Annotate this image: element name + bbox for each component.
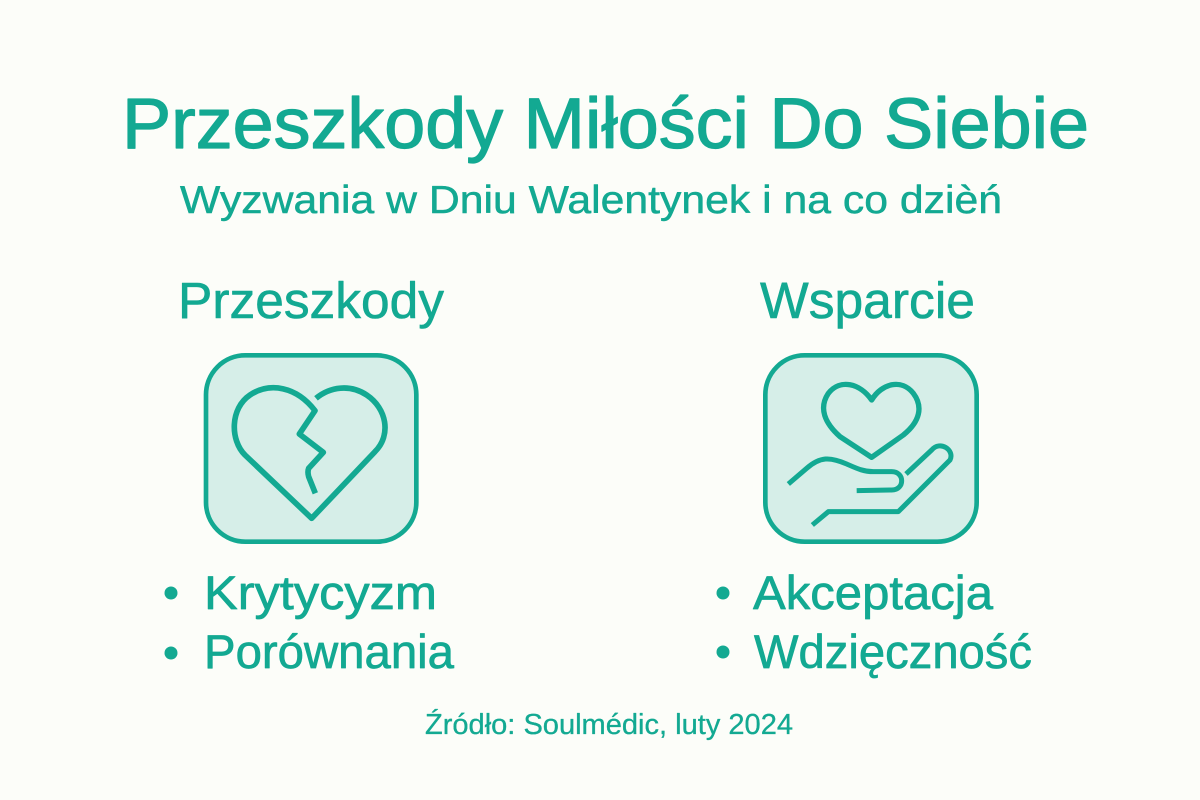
item: Krytycyzm: Krytycyzm <box>204 566 437 619</box>
item: Akceptacja: Akceptacja <box>753 566 994 619</box>
source note: Źródło: Soulmédic, luty 2024 <box>425 708 793 741</box>
item: Porównania: Porównania <box>204 625 455 678</box>
panel: support <box>716 272 1032 678</box>
icon: broken heart <box>206 355 416 542</box>
subtitle: Wyzwania w Dniu Walentynek i na co dzièń <box>180 179 1002 222</box>
support list <box>716 566 1032 678</box>
bullet <box>164 586 178 600</box>
panel: obstacles <box>164 272 455 678</box>
obstacles list <box>164 566 455 678</box>
obstacles heading: Przeszkody <box>178 272 445 329</box>
bullet <box>716 646 730 658</box>
support heading: Wsparcie <box>760 272 975 329</box>
bullet <box>716 586 730 600</box>
icon: heart in hand <box>765 355 977 542</box>
item: Wdzięczność: Wdzięczność <box>754 625 1032 678</box>
bullet <box>164 646 178 660</box>
title: Przeszkody Miłości Do Siebie <box>122 85 1089 164</box>
